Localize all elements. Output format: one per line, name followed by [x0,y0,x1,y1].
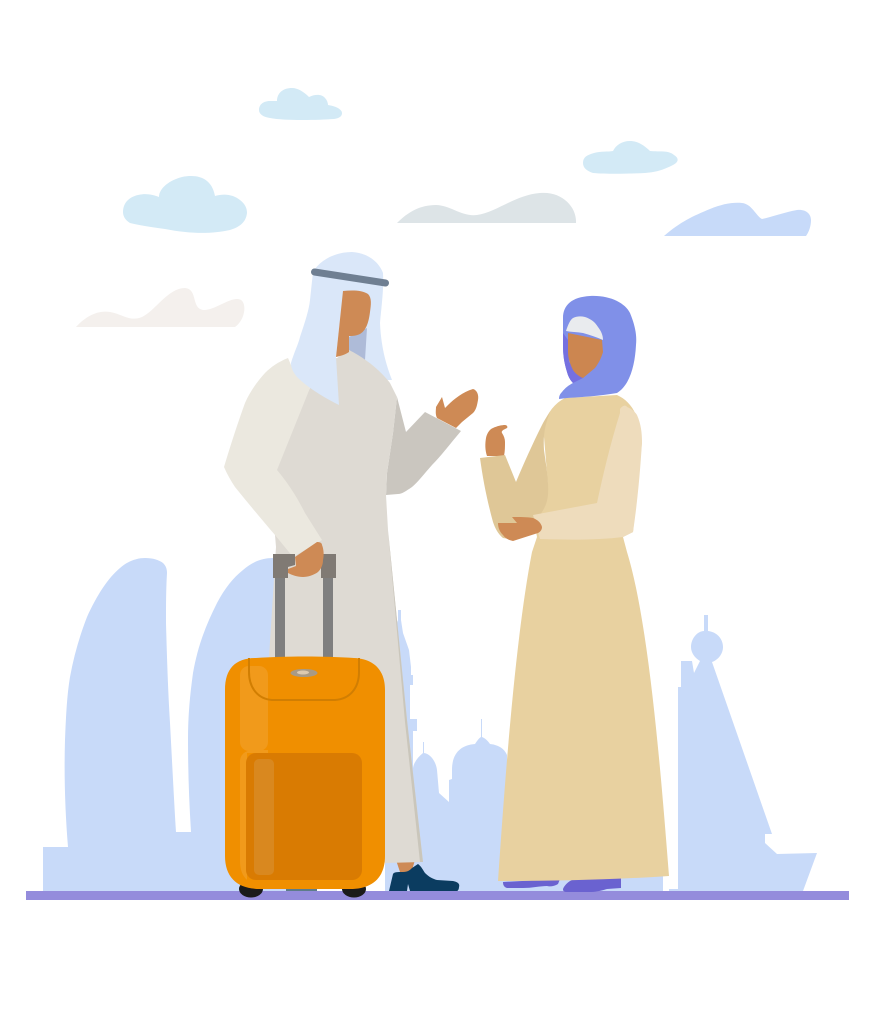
man: ankle [396,860,415,873]
man: robe [268,350,423,863]
skyline: minaret and central domes [385,610,510,891]
woman: dress [498,395,669,881]
woman: near sleeve [533,406,642,540]
skyline: strip under the woman's dress [498,870,663,891]
woman: inner scarf shadow [563,333,583,383]
man: far arm [386,397,461,495]
woman: right shoe [563,877,621,892]
skyline [43,558,817,891]
suitcase: wheels [239,880,366,898]
suitcase: right handle bracket [321,554,336,578]
man: far shoe [286,888,317,891]
woman [480,296,669,892]
cloud: top centre [259,88,342,120]
woman: left shoe [503,879,560,888]
man: light sleeve [224,358,322,557]
cloud: top right [583,141,678,174]
suitcase [225,542,385,898]
woman: far arm [480,412,550,540]
man: robe hem shadow [388,530,423,862]
woman: raised hand [485,425,507,456]
man [224,252,478,891]
woman: lower hand [498,517,542,541]
woman: under cap [566,316,603,340]
suitcase: pocket rim [240,750,268,880]
suitcase: front pocket [246,753,362,880]
suitcase: pocket highlight [254,759,274,875]
woman: headscarf [559,296,636,399]
ground line [26,891,849,900]
man: shoe [389,864,459,891]
man: beard [349,328,367,360]
suitcase: poles [275,575,333,660]
cloud: left [123,176,247,233]
suitcase: left handle bracket [273,554,295,578]
suitcase: top zip [249,658,359,700]
man: face [336,290,371,357]
man: back of head scarf [313,252,392,380]
man: hand on suitcase [288,542,324,577]
skyline: left towers [43,558,300,891]
skyline: right domed tower and ship [669,615,817,891]
woman: face [568,333,603,378]
man: headband [314,272,386,283]
cloud: beige left [76,288,244,327]
suitcase: left highlight [240,666,268,751]
man: front scarf flap [291,272,343,405]
man: raised hand [436,389,478,428]
suitcase: badge [290,669,318,677]
cloud: grey centre [397,193,576,223]
suitcase: body [225,656,385,889]
cloud: blue right [664,203,811,236]
